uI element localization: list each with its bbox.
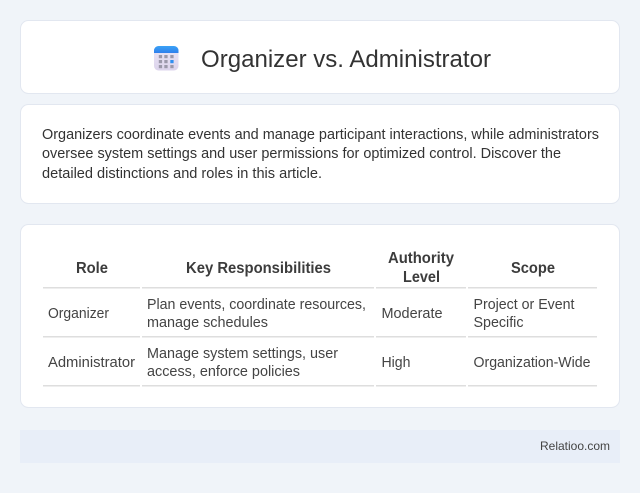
table row: organizer: Project or Event xyxy=(474,297,574,313)
table row: administrator xyxy=(48,346,590,380)
panel: description xyxy=(20,104,620,204)
text block: description xyxy=(42,127,599,182)
table row: administrator: Organization-Wide xyxy=(474,355,590,371)
table row: organizer: manage schedules xyxy=(147,315,268,331)
table row: administrator: Manage system settings, user xyxy=(147,346,338,362)
table row: organizer: Moderate xyxy=(382,306,442,322)
table header row: Level xyxy=(403,269,440,286)
title: Organizer vs. Administrator xyxy=(201,46,491,73)
table header row: Scope xyxy=(511,260,555,277)
table row: organizer: Specific xyxy=(474,315,524,331)
panel: comparison table xyxy=(20,224,620,408)
panel: title header xyxy=(20,20,620,94)
table header row xyxy=(76,250,555,286)
table row: organizer: Organizer xyxy=(48,306,109,322)
table row: administrator: Administrator xyxy=(48,355,135,371)
table header row: Key Responsibilities xyxy=(186,260,331,277)
footer bar xyxy=(20,430,620,463)
table header row: Authority xyxy=(388,250,454,267)
text block: description: Organizers coordinate events and manage participant interactions, while administrators xyxy=(42,127,599,143)
table row: organizer xyxy=(48,297,574,331)
table row: organizer: Plan events, coordinate resources, xyxy=(147,297,366,313)
table header row: Role xyxy=(76,260,108,277)
text block: description: detailed distinctions and roles in this article. xyxy=(42,166,322,182)
icon: calendar xyxy=(154,46,178,70)
footer source text: Relatioo.com xyxy=(540,439,610,453)
text block: description: oversee system settings and user permissions for optimized control. Discover the xyxy=(42,146,561,162)
table row: administrator: High xyxy=(382,355,410,371)
table row: administrator: access, enforce policies xyxy=(147,364,300,380)
